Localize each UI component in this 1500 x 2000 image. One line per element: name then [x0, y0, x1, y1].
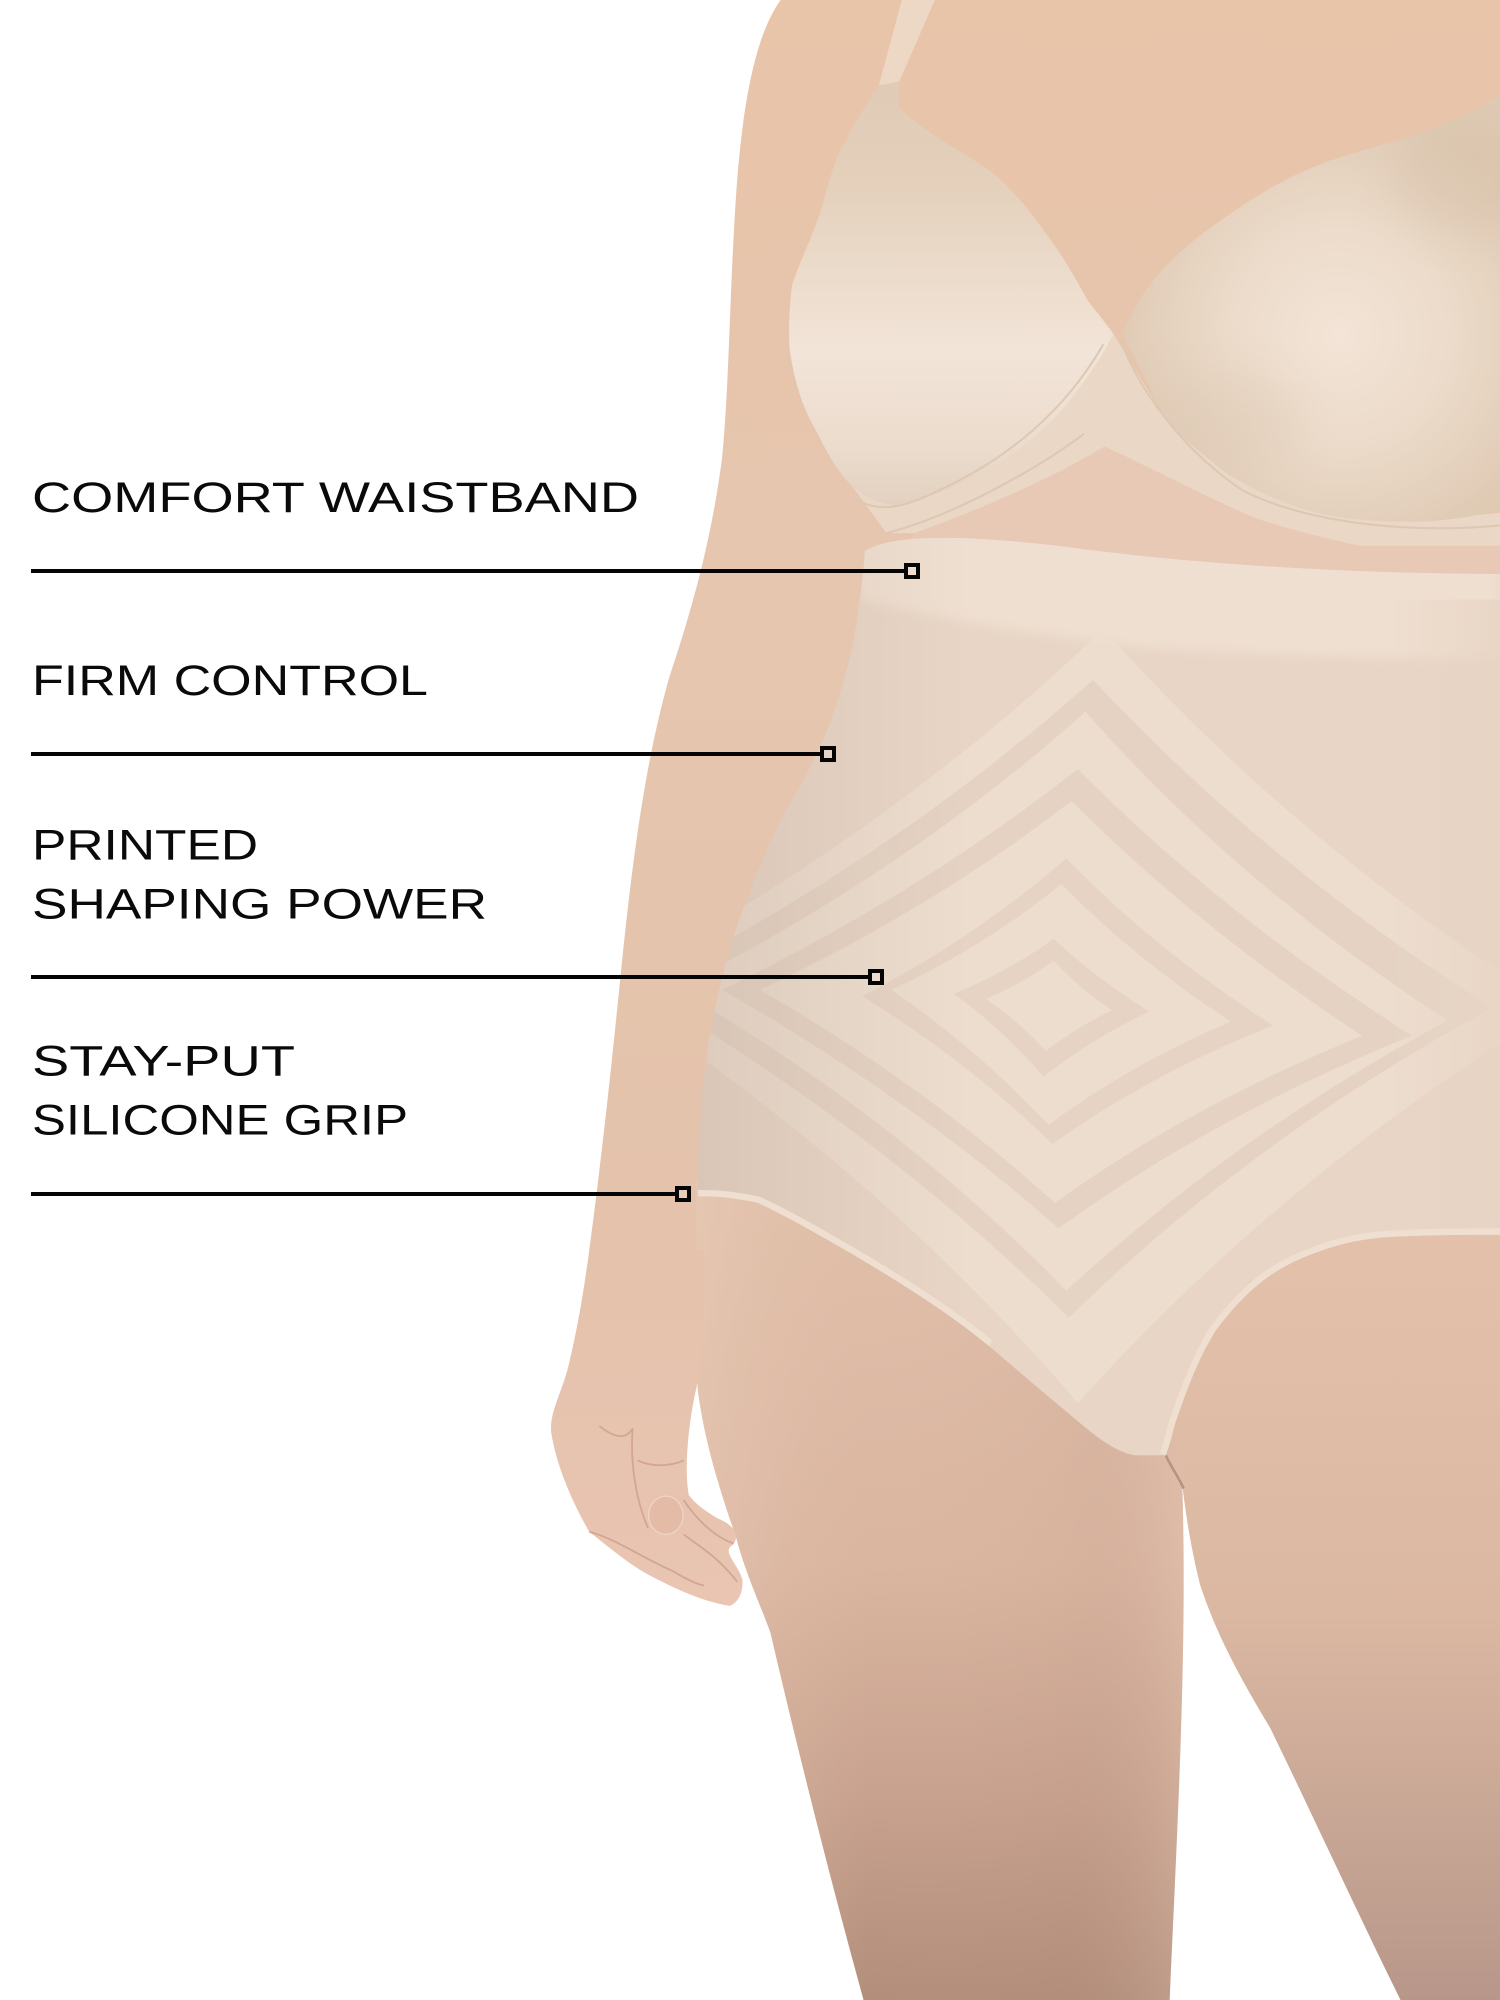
- midriff: [893, 446, 1500, 587]
- leader line: [31, 975, 870, 979]
- marker: [870, 971, 882, 983]
- leader line: [31, 569, 906, 573]
- leader line: [31, 752, 822, 756]
- marker: [677, 1188, 689, 1200]
- marker: [822, 748, 834, 760]
- bra strap: [879, 0, 935, 85]
- inner thigh crease: [1166, 1455, 1184, 1489]
- bra: [789, 77, 1500, 546]
- label text: FIRM CONTROL: [32, 657, 428, 705]
- brief side shading: [698, 759, 838, 1224]
- thumbnail: [649, 1496, 683, 1534]
- label text: PRINTED: [32, 822, 258, 870]
- label text line two: SHAPING POWER: [32, 881, 487, 929]
- callout: stay-put silicone grip: [31, 1037, 689, 1200]
- callout: comfort waistband: [31, 474, 918, 577]
- label text: STAY-PUT: [32, 1037, 295, 1085]
- thumb and fingers: [589, 1426, 737, 1585]
- bra seams: [852, 339, 1500, 533]
- diamond print: [706, 646, 1416, 1402]
- callout: printed shaping power: [31, 822, 882, 983]
- torso and arm skin: [589, 0, 1500, 1250]
- right cup: [1123, 95, 1500, 522]
- brief hem: [698, 1196, 1500, 1455]
- brief right fade: [1477, 600, 1500, 1052]
- shapewear brief: [698, 538, 1500, 1456]
- leader line: [31, 1192, 677, 1196]
- label text: COMFORT WAISTBAND: [32, 474, 639, 522]
- waistband: [861, 538, 1496, 654]
- label text line two: SILICONE GRIP: [32, 1097, 408, 1145]
- underband: [852, 334, 1500, 546]
- brief base: [689, 523, 1500, 1467]
- callout: firm control: [31, 657, 834, 760]
- thigh right: [1167, 1199, 1500, 2000]
- left cup: [789, 82, 1114, 505]
- thigh left: [695, 1180, 1189, 2000]
- marker: [906, 565, 918, 577]
- hand: [551, 1250, 743, 1606]
- figure: model wearing shapewear: [551, 0, 1500, 2000]
